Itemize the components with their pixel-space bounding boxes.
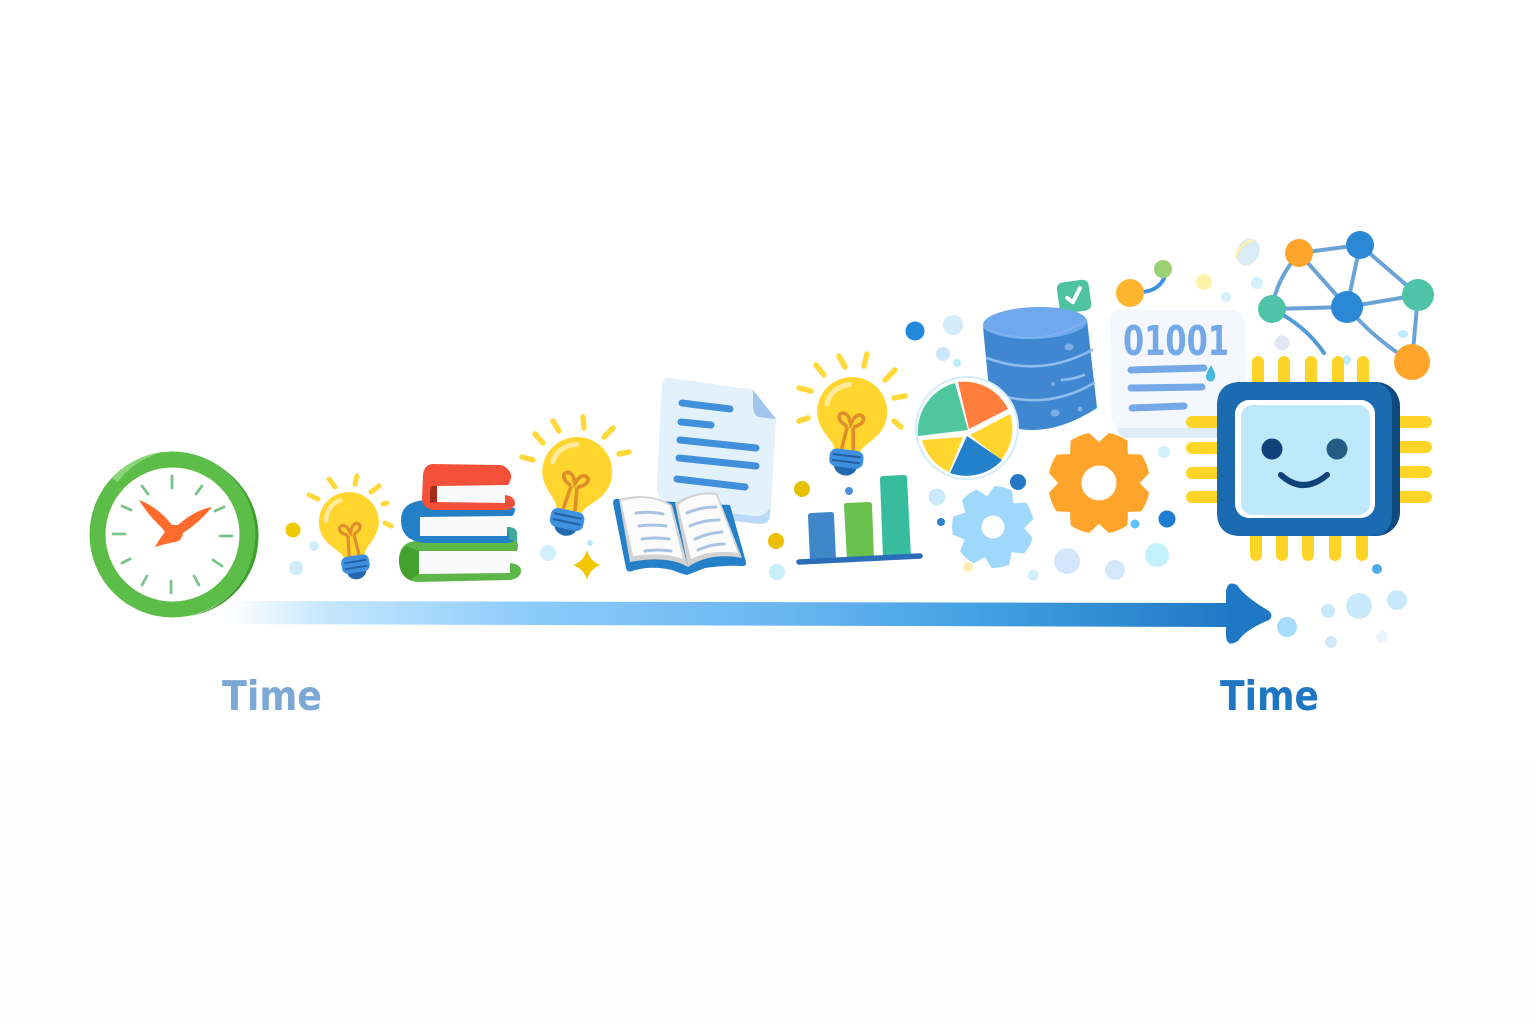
green book <box>399 541 521 582</box>
icon: document page <box>657 378 776 524</box>
chip body <box>1217 382 1400 536</box>
icon: yellow sparkle <box>573 550 600 580</box>
bar green <box>844 502 874 560</box>
icon: blue gear <box>940 476 1045 580</box>
small cyan dot on gear <box>1130 520 1140 528</box>
icon: connector nodes <box>1116 260 1172 307</box>
smiling face <box>1262 438 1348 485</box>
bar blue <box>808 512 836 561</box>
slice orange <box>958 382 1008 429</box>
icon: medium light bulb <box>522 417 629 543</box>
icon: check badge <box>1056 279 1092 314</box>
dots near bar chart <box>768 481 853 580</box>
chip pins <box>1192 362 1426 555</box>
floating pale dots <box>1196 235 1408 365</box>
slice green <box>918 383 968 436</box>
slice blue <box>950 436 1002 476</box>
dots and sparkle near second bulb <box>540 540 600 580</box>
icon: clock <box>90 452 259 618</box>
slice yellow left <box>922 437 963 472</box>
slice yellow right <box>970 414 1012 460</box>
icon: small light bulb <box>309 476 391 584</box>
icon: pie chart <box>916 377 1018 479</box>
binary digits: 01001 <box>1123 317 1229 365</box>
bar teal <box>880 475 911 558</box>
label: Time start: Time <box>222 672 322 720</box>
blue book <box>401 500 517 543</box>
timeline arrow <box>228 584 1272 644</box>
icon: stack of books <box>399 464 521 582</box>
label: Time end: Time <box>1220 672 1319 720</box>
icon: gear orange <box>1032 416 1166 550</box>
icon: database <box>982 305 1097 430</box>
icon: bar chart <box>799 475 920 562</box>
icon: neural network <box>1258 231 1434 380</box>
dots around pie and gears <box>906 315 1176 580</box>
chip screen <box>1235 400 1375 518</box>
icon: open book <box>613 492 746 575</box>
dots after arrow tip <box>1277 564 1407 648</box>
red book <box>422 464 515 510</box>
icon: binary document <box>1110 310 1246 438</box>
icon: large light bulb <box>799 354 905 480</box>
icon: smiling AI chip <box>1192 362 1426 555</box>
dots near first bulb <box>286 522 319 575</box>
